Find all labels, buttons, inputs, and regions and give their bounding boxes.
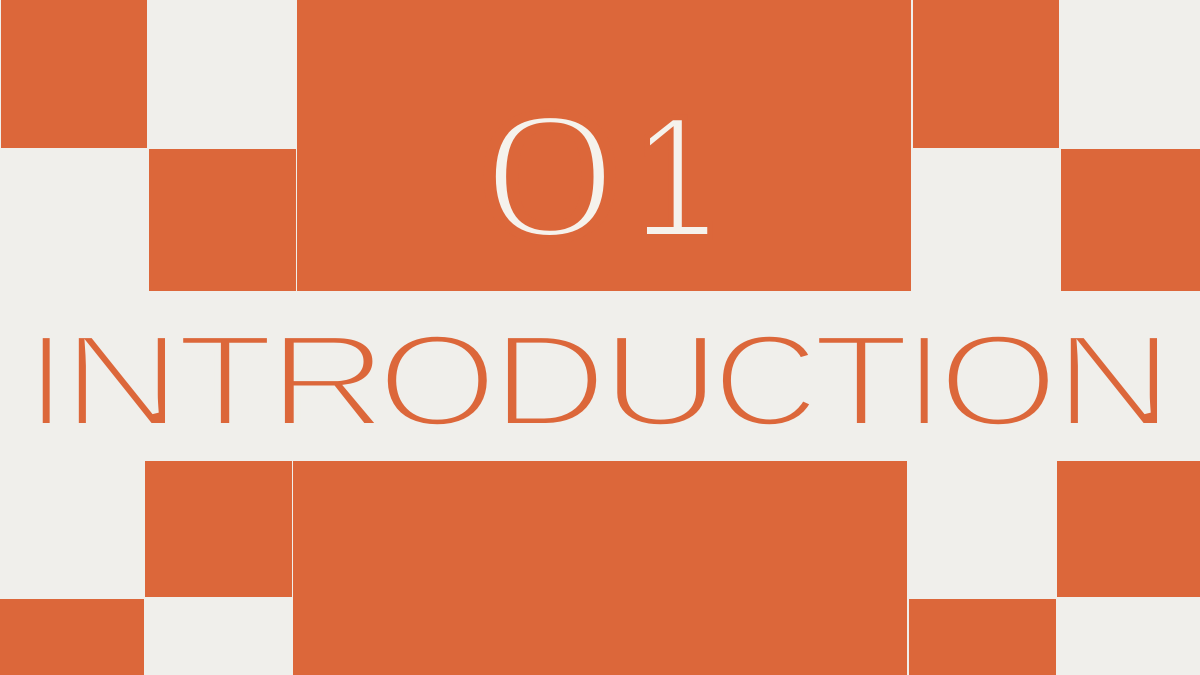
title: introduction: T (176, 307, 274, 453)
title: introduction: C (712, 307, 819, 454)
title: introduction: I (906, 307, 942, 454)
title: introduction: T (812, 307, 910, 453)
title: introduction (28, 307, 1174, 454)
title: introduction: O (938, 308, 1058, 454)
section number: 0 (480, 78, 620, 276)
section number: 1 (633, 79, 717, 274)
bottom checker blocks (0, 461, 1200, 675)
title: introduction: O (377, 308, 497, 454)
title: introduction: N (62, 307, 182, 454)
title: introduction: U (601, 307, 721, 454)
section number (480, 78, 717, 276)
title: introduction: D (492, 307, 607, 453)
title: introduction: I (28, 307, 64, 454)
title: introduction: R (268, 307, 388, 454)
top checker blocks (1, 0, 1200, 291)
title: introduction: N (1054, 307, 1174, 454)
